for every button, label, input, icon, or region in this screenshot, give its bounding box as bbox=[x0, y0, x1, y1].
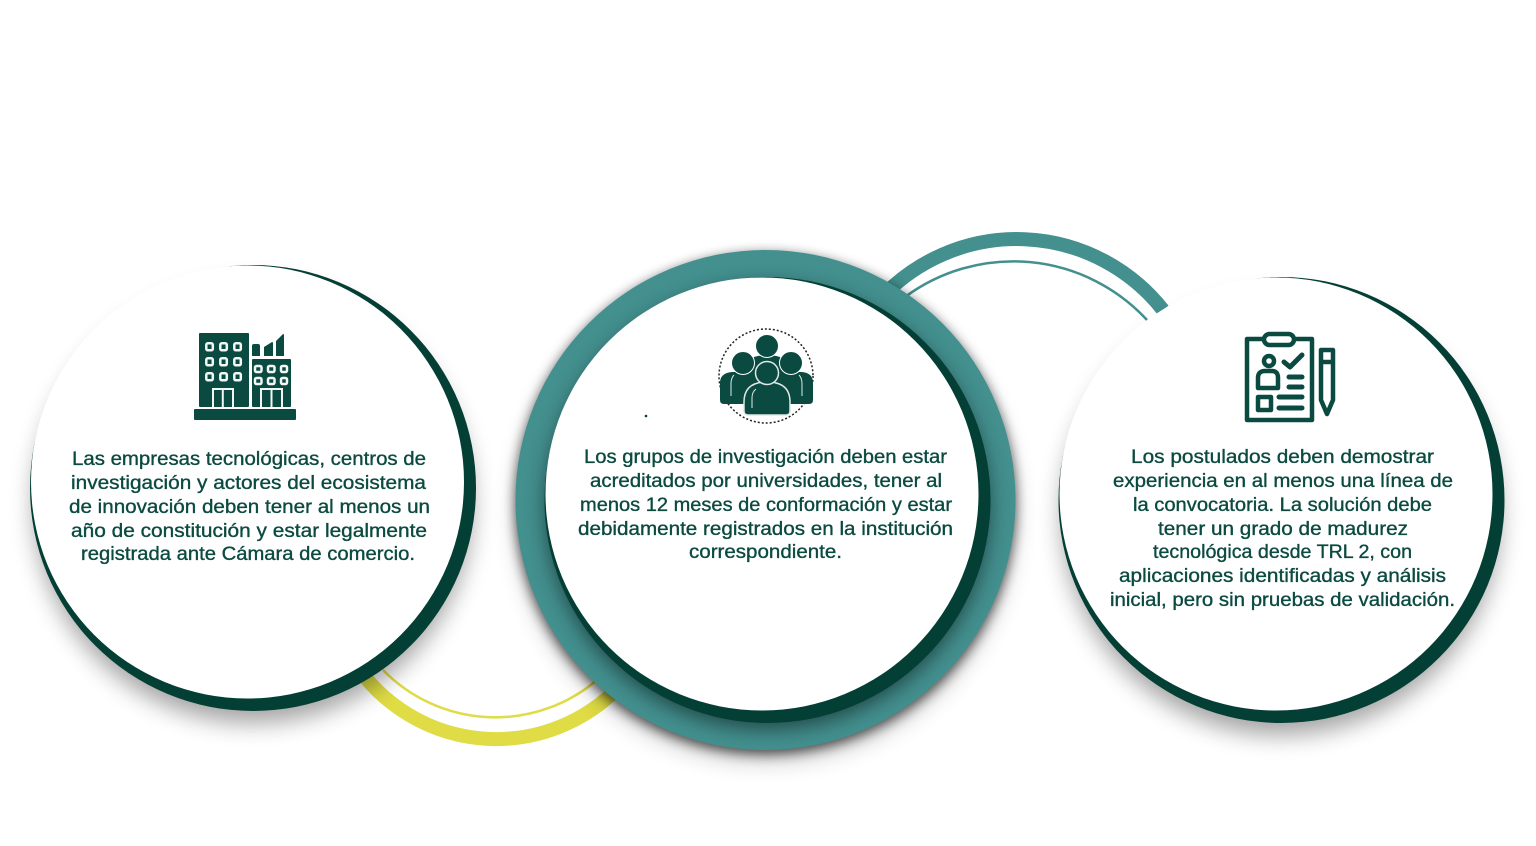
small dot bbox=[645, 415, 647, 417]
text: center: debidamente registrados en la institución bbox=[578, 518, 953, 540]
text: left bbox=[69, 448, 430, 565]
text: right: aplicaciones identificadas y análisis bbox=[1119, 565, 1446, 587]
panel: right circle bbox=[1058, 277, 1504, 735]
teal connector arcs bbox=[881, 239, 1163, 320]
text: right: tener un grado de madurez bbox=[1158, 518, 1408, 540]
text: center bbox=[578, 446, 953, 563]
text: left: Las empresas tecnológicas, centros de bbox=[72, 448, 426, 470]
text: right: tecnológica desde TRL 2, con bbox=[1153, 541, 1412, 563]
yellow connector arcs bbox=[356, 665, 626, 739]
text: right: inicial, pero sin pruebas de validación. bbox=[1110, 589, 1455, 611]
icon: group of people bbox=[719, 329, 813, 423]
text: left: investigación y actores del ecosistema bbox=[71, 472, 426, 494]
text: right: la convocatoria. La solución debe bbox=[1133, 494, 1432, 516]
text: right: experiencia en al menos una línea de bbox=[1113, 470, 1453, 492]
text: left: año de constitución y estar legalmente bbox=[71, 520, 427, 542]
text: center: menos 12 meses de conformación y estar bbox=[580, 494, 953, 516]
panel: center circle bbox=[516, 250, 1016, 761]
text: center: correspondiente. bbox=[689, 541, 842, 563]
panel: left circle bbox=[30, 265, 476, 723]
text: left: de innovación deben tener al menos un bbox=[69, 496, 430, 518]
text: center: acreditados por universidades, tener al bbox=[590, 470, 942, 492]
text: left: registrada ante Cámara de comercio. bbox=[81, 543, 415, 565]
icon: buildings bbox=[194, 333, 296, 420]
text: center: Los grupos de investigación deben estar bbox=[584, 446, 948, 468]
icon: clipboard checklist bbox=[1247, 334, 1333, 420]
text: right: Los postulados deben demostrar bbox=[1131, 446, 1435, 468]
text: right bbox=[1110, 446, 1455, 611]
